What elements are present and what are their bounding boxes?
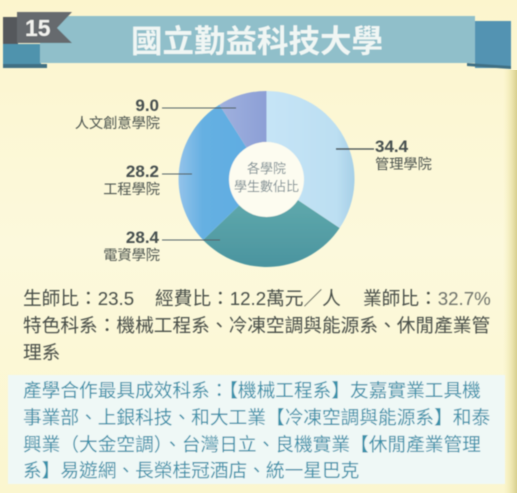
- number flag: [3, 12, 72, 44]
- donut hole: [229, 142, 304, 217]
- callout: 工程學院: [103, 162, 192, 198]
- cooperation text: 興業（大金空調）、台灣日立、良機實業【休閒產業管理: [23, 434, 481, 455]
- title: 國立勤益科技大學: [131, 23, 383, 59]
- callout: 電資學院: [103, 228, 220, 264]
- ribbon main band: [40, 16, 475, 63]
- callout: 電資學院: 28.4: [126, 228, 160, 247]
- center caption: [234, 161, 299, 194]
- center caption: 學生數佔比: [234, 179, 299, 194]
- stats text block: 生師比：23.5: [23, 288, 134, 309]
- stats text block: 經費比：12.2萬元／人: [155, 288, 341, 309]
- cooperation text: 系】易遊網、長榮桂冠酒店、統一星巴克: [23, 460, 359, 481]
- panel: industry cooperation: [8, 375, 505, 484]
- stats text block: 業師比：32.7%: [363, 288, 491, 309]
- callout: 管理學院: 管理學院: [375, 156, 432, 173]
- stats text block: [23, 288, 491, 363]
- callout: 工程學院: 28.2: [126, 162, 159, 181]
- stats text block: 理系: [23, 342, 60, 363]
- callout: 人文創意學院: 人文創意學院: [75, 115, 160, 132]
- ribbon right tail: [467, 21, 511, 69]
- ribbon left tail: [3, 44, 47, 68]
- callout: 工程學院: 工程學院: [103, 182, 160, 198]
- callout: 管理學院: 34.4: [375, 137, 409, 156]
- cooperation text: [23, 380, 490, 481]
- segment: 電資學院 28.4: [203, 200, 340, 267]
- header ribbon: [3, 12, 511, 69]
- segment: 人文創意學院 9.0: [219, 91, 266, 148]
- cooperation text: 產學合作最具成效科系：【機械工程系】友嘉實業工具機: [23, 380, 481, 401]
- stats text block: 特色科系：機械工程系、冷凍空調與能源系、休閒產業管: [23, 315, 490, 336]
- callout: 人文創意學院: 9.0: [135, 96, 159, 115]
- center caption: 各學院: [247, 161, 286, 176]
- callout: 電資學院: 電資學院: [103, 248, 160, 264]
- callout: 管理學院: [336, 137, 432, 173]
- callout: 人文創意學院: [75, 96, 236, 132]
- number flag: 15: [25, 15, 51, 41]
- segment: 管理學院 34.4: [266, 91, 355, 228]
- segment: 工程學院 28.2: [179, 105, 247, 240]
- cooperation text: 事業部、上銀科技、和大工業【冷凍空調與能源系】和泰: [23, 407, 490, 428]
- donut chart: [179, 91, 355, 267]
